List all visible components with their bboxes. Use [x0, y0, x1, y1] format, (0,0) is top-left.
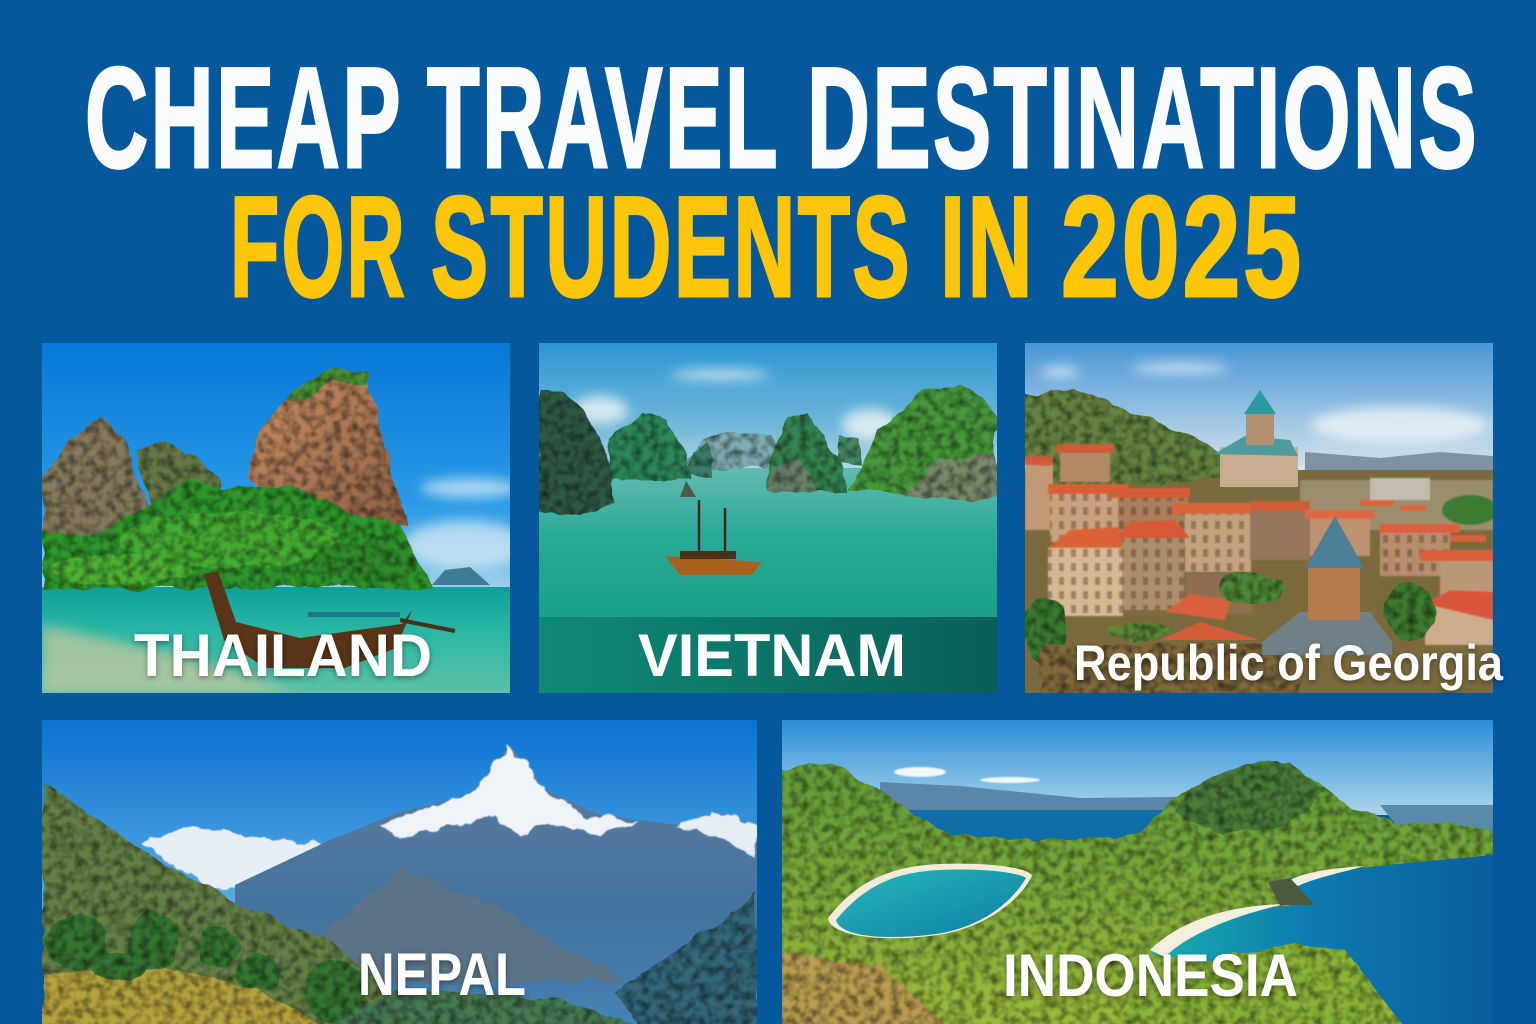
sky	[1025, 343, 1493, 473]
city ground	[1025, 470, 1493, 693]
limestone cliffs	[42, 368, 432, 588]
valley	[320, 990, 650, 1024]
foreground hill	[42, 965, 330, 1024]
label: Indonesia: INDONESIA	[1003, 942, 1298, 1009]
title line 1	[85, 39, 1479, 198]
label band	[539, 617, 997, 693]
sea	[900, 810, 1190, 840]
distant hills	[880, 782, 1190, 815]
city buildings	[1025, 444, 1498, 645]
karst islands	[539, 386, 997, 515]
title line 1: CHEAP	[85, 39, 403, 198]
label: Nepal: NEPAL	[358, 941, 526, 1008]
panel: Indonesia	[775, 720, 1500, 1024]
lagoon	[828, 864, 1032, 938]
headland rock	[1268, 878, 1315, 905]
panel: Thailand	[42, 343, 527, 693]
sea	[42, 587, 510, 693]
sky	[42, 343, 510, 593]
panel: Vietnam	[539, 343, 997, 693]
bay	[1150, 855, 1493, 1024]
longtail boat	[204, 571, 455, 668]
title line 2: IN	[940, 168, 1035, 327]
distant mountains	[1305, 452, 1493, 470]
clouds	[403, 478, 527, 569]
panel: Georgia	[1023, 343, 1498, 700]
water	[539, 468, 997, 617]
title line 2: STUDENTS	[431, 168, 912, 327]
label: Thailand: THAILAND	[134, 622, 432, 689]
right slope	[615, 893, 757, 1024]
title line 1: TRAVEL	[427, 39, 780, 198]
church tower	[1262, 516, 1392, 655]
sky	[782, 720, 1493, 815]
clouds	[1040, 363, 1490, 443]
junk boat	[665, 500, 762, 575]
main hills	[775, 760, 1500, 1024]
cathedral on hill	[1214, 390, 1298, 487]
sky	[539, 343, 997, 468]
beach	[1150, 904, 1285, 957]
main mountain	[235, 745, 757, 1024]
left slope	[42, 780, 420, 1024]
clouds	[572, 370, 898, 441]
snow range left	[140, 825, 328, 890]
sand foreground	[42, 625, 300, 693]
title	[85, 39, 1479, 327]
lower roof	[1160, 622, 1260, 640]
title line 2: FOR	[230, 168, 407, 327]
hill	[1025, 388, 1240, 490]
trees	[43, 912, 365, 1022]
title line 2: 2025	[1061, 168, 1304, 327]
sky	[42, 720, 757, 910]
foreground hill	[1100, 945, 1402, 1024]
panel: Nepal	[42, 720, 757, 1024]
label: Republic of Georgia: Republic of Georgia	[1074, 635, 1504, 691]
distant island	[432, 567, 490, 585]
trees and bottom foliage	[1023, 572, 1434, 700]
label: Vietnam: VIETNAM	[638, 622, 906, 689]
small rock	[680, 481, 696, 497]
clouds	[894, 767, 1040, 783]
